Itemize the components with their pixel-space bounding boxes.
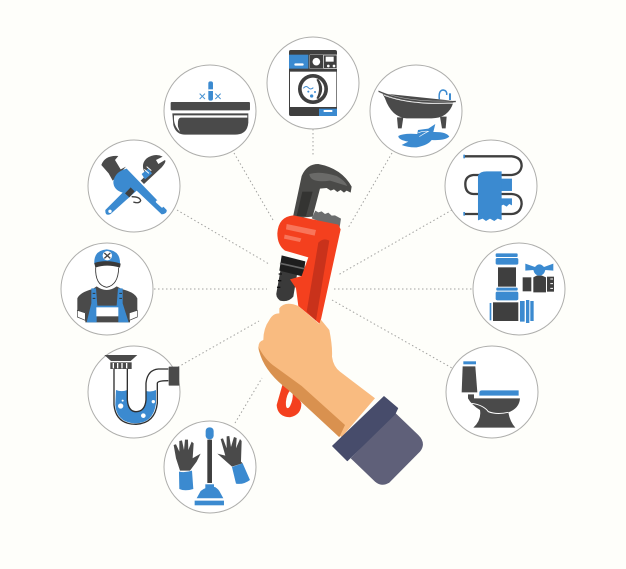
icon: plumber with cap and overalls bbox=[77, 249, 137, 322]
hand and forearm bbox=[258, 304, 375, 437]
illustration: hand holding red pipe wrench bbox=[258, 164, 423, 485]
icon: sink with faucet bbox=[171, 81, 250, 135]
icon: washing machine bbox=[289, 50, 337, 116]
red wrench body bbox=[277, 215, 341, 324]
icon: toilet bbox=[462, 361, 520, 428]
icon: sink trap with water bbox=[104, 355, 179, 424]
icon: heated towel rail bbox=[463, 155, 522, 221]
wrench handle loop bbox=[277, 382, 301, 417]
sleeve bbox=[351, 413, 423, 485]
icon: crossed wrenches bbox=[101, 155, 167, 215]
icon: pipes and valve bbox=[490, 253, 554, 323]
cuff bbox=[333, 397, 398, 461]
icon: bathtub with leaking water bbox=[378, 90, 456, 147]
threaded screw bbox=[276, 263, 298, 301]
icon: gloves and plunger bbox=[174, 427, 250, 505]
upper wrench jaw bbox=[293, 164, 352, 218]
lower wrench jaw bbox=[312, 211, 341, 229]
